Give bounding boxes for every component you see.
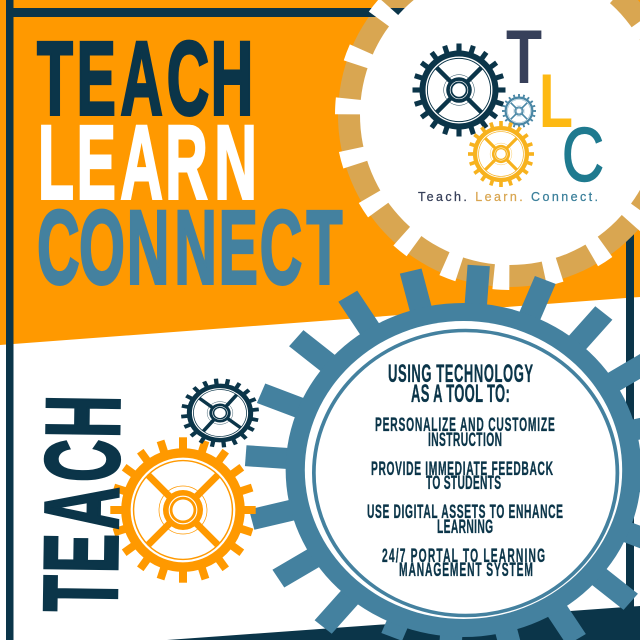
list item: portal: 24/7 PORTAL TO LEARNING xyxy=(382,546,545,567)
list item: digital assets: USE DIGITAL ASSETS TO ENHANCE xyxy=(367,502,563,523)
circle heading: AS A TOOL TO: xyxy=(411,381,510,408)
title xyxy=(37,21,342,307)
large blue gear xyxy=(245,265,640,640)
icon: logo navy gear xyxy=(412,44,506,136)
logo gear: tan and white cog with logo xyxy=(6,0,640,287)
logo tagline: Teach. Learn. Connect. xyxy=(418,190,598,204)
logo letter C: C xyxy=(562,113,604,198)
orange header background xyxy=(0,0,640,345)
vertical heading: TEACH: TEACH xyxy=(23,394,143,612)
list item: personalize: INSTRUCTION xyxy=(428,430,502,451)
navy frame left bar xyxy=(6,0,14,640)
icon: logo yellow gear xyxy=(468,121,534,187)
icon: orange gear xyxy=(110,437,256,583)
white disk xyxy=(360,0,640,265)
navy frame top bar xyxy=(6,8,407,17)
list item: portal xyxy=(382,546,545,581)
logo letter L: L xyxy=(539,59,573,144)
text block: technology uses xyxy=(367,361,563,581)
list item: personalize xyxy=(375,415,555,451)
title line: TEACH: TEACH xyxy=(37,21,253,138)
logo: TLC mark xyxy=(412,15,604,204)
list item: digital assets: LEARNING xyxy=(437,517,493,538)
tan ring xyxy=(338,0,640,287)
icon: small navy gear xyxy=(177,375,263,451)
circle heading xyxy=(388,361,533,408)
logo letter T: T xyxy=(506,15,542,100)
title line: CONNECT: CONNECT xyxy=(37,190,342,307)
title line: LEARN: LEARN xyxy=(38,105,257,222)
white cog teeth xyxy=(341,0,640,284)
list item: feedback: PROVIDE IMMEDIATE FEEDBACK xyxy=(371,459,553,480)
circle heading: USING TECHNOLOGY xyxy=(388,361,533,388)
list item: portal: MANAGEMENT SYSTEM xyxy=(399,560,533,581)
list item: personalize: PERSONALIZE AND CUSTOMIZE xyxy=(375,415,555,436)
navy frame right bar xyxy=(626,233,634,640)
navy bottom band xyxy=(167,606,640,640)
list item: feedback xyxy=(371,459,553,494)
icon: logo blue gear xyxy=(502,94,536,128)
list item: digital assets xyxy=(367,502,563,538)
list item: feedback: TO STUDENTS xyxy=(426,473,501,494)
